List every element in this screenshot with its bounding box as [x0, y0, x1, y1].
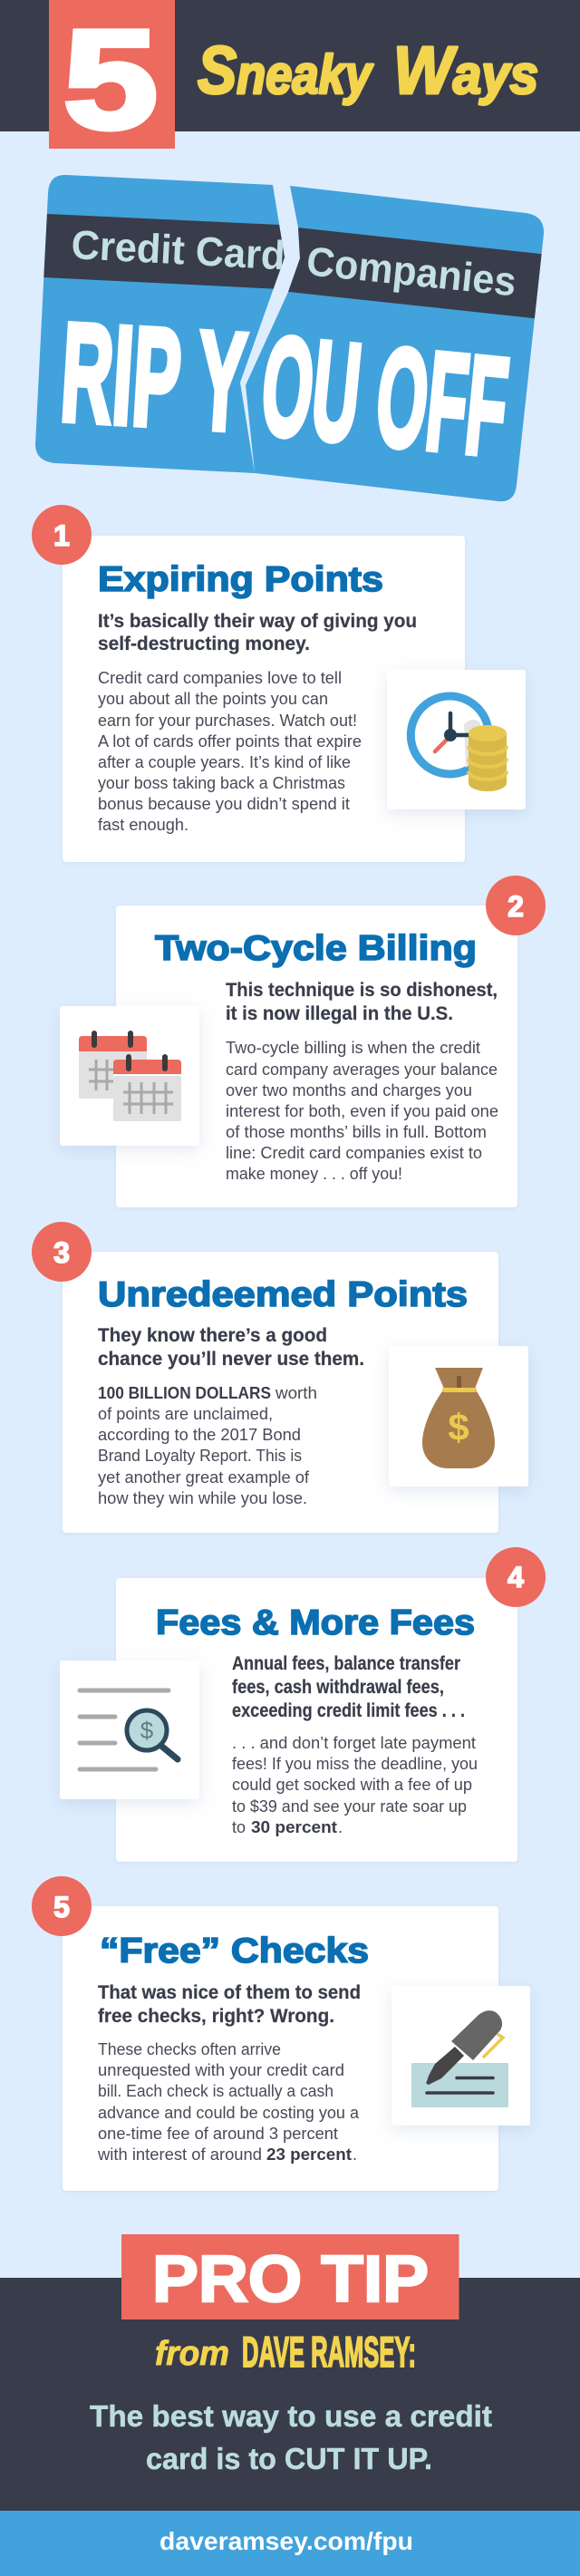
body text 5: one-time fee of around 3 percent [98, 2125, 338, 2143]
subheading 5: free checks, right? Wrong. [98, 2006, 334, 2027]
big number five block [49, 0, 175, 158]
body text 1: you about all the points you can [98, 690, 328, 708]
body text 3: worth [275, 1384, 317, 1402]
panel 1: expiring points [32, 505, 526, 862]
pro tip banner: PRO TIP [152, 2243, 429, 2316]
badge 1 [32, 505, 92, 565]
body text 2: Two-cycle billing is when the credit [226, 1039, 480, 1057]
body text 5: 23 percent [266, 2145, 352, 2164]
heading 2: Two-Cycle Billing [155, 929, 477, 968]
subheading 1: It’s basically their way of giving you [98, 611, 417, 632]
subheading 3: They know there’s a good [98, 1325, 327, 1346]
body text 5: . [353, 2145, 357, 2164]
body text 1: bonus because you didn’t spend it [98, 795, 350, 813]
heading: Sneaky Ways: Ways [393, 33, 538, 108]
body text 1: earn for your purchases. Watch out! [98, 712, 357, 730]
heading 4: Fees & More Fees [156, 1603, 475, 1642]
badge 1: 1 [53, 519, 70, 552]
body text 2 [226, 1039, 498, 1183]
subheading 2: it is now illegal in the U.S. [226, 1003, 453, 1024]
subheading 4: exceeding credit limit fees . . . [232, 1700, 465, 1721]
body text 2: interest for both, even if you paid one [226, 1102, 498, 1120]
body text 3: of points are unclaimed, [98, 1405, 273, 1423]
panel 3: unredeemed points [32, 1222, 528, 1533]
badge 5: 5 [53, 1891, 70, 1923]
body text 5: with interest of around [97, 2145, 262, 2164]
subheading 1 [98, 611, 417, 654]
icon tile: money bag: $ [448, 1406, 469, 1448]
attribution: from Dave Ramsey: DAVE RAMSEY: [242, 2328, 416, 2376]
body text 3: how they win while you lose. [98, 1489, 307, 1507]
card right half [240, 177, 553, 508]
body text 5 [97, 2040, 360, 2164]
pro tip statement: card is to CUT IT UP. [146, 2442, 432, 2475]
attribution: from Dave Ramsey [155, 2328, 416, 2376]
heading 5: “Free” Checks [100, 1932, 369, 1971]
website bar: daveramsey.com/fpu [160, 2527, 413, 2555]
panel 2: two-cycle billing [60, 876, 546, 1207]
icon tile: clock and coins [387, 670, 526, 809]
body text 3: 100 BILLION DOLLARS [98, 1384, 271, 1402]
header band [0, 0, 580, 158]
attribution: from Dave Ramsey: from [155, 2335, 229, 2373]
subheading 4: fees, cash withdrawal fees, [232, 1677, 444, 1698]
body text 4: 30 percent [251, 1818, 337, 1836]
body text 2: card company averages your balance [226, 1060, 498, 1079]
badge 5 [32, 1876, 92, 1936]
body text 4: . . . and don’t forget late payment [232, 1734, 476, 1752]
icon tile: magnifier over bill [60, 1661, 199, 1799]
body text 4: . [338, 1818, 343, 1836]
big number five block: 5 [63, 1, 158, 158]
body text 4: to $39 and see your rate soar up [232, 1797, 467, 1816]
body text 4 [232, 1734, 478, 1836]
subheading 2: This technique is so dishonest, [226, 980, 498, 1001]
badge 3: 3 [53, 1236, 70, 1269]
body text 1: fast enough. [98, 816, 188, 834]
body text 2: of those months’ bills in full. Bottom [226, 1123, 487, 1141]
subheading 4 [232, 1653, 465, 1721]
body text 1: your boss taking back a Christmas [98, 774, 345, 792]
subheading 3 [98, 1325, 364, 1370]
website bar [0, 2511, 580, 2576]
icon tile: magnifier over bill: $ [140, 1717, 154, 1744]
body text 5: unrequested with your credit card [98, 2061, 344, 2079]
body text 1: after a couple years. It’s kind of like [98, 753, 351, 771]
icon tile: money bag [389, 1346, 528, 1487]
body text 4: fees! If you miss the deadline, you [232, 1755, 478, 1773]
card right half: Companies [304, 237, 518, 305]
body text 1: Credit card companies love to tell [98, 669, 342, 687]
badge 4: 4 [508, 1561, 524, 1593]
subheading 5 [98, 1982, 361, 2027]
panel 5: free checks [32, 1876, 530, 2191]
pro tip footer [0, 2234, 580, 2511]
subheading 5: That was nice of them to send [98, 1982, 361, 2003]
pro tip statement [90, 2399, 492, 2475]
panel 4: fees and more fees [60, 1547, 546, 1862]
card left half: RIP Y [57, 294, 250, 460]
body text 2: over two months and charges you [226, 1081, 472, 1099]
pro tip banner [121, 2234, 459, 2319]
icon tile: calendars [60, 1006, 199, 1146]
body text 3: yet another great example of [98, 1468, 310, 1487]
body text 5: advance and could be costing you a [98, 2104, 360, 2122]
body text 2: make money . . . off you! [226, 1165, 402, 1183]
heading: Sneaky Ways [198, 33, 538, 108]
torn credit card title [27, 168, 553, 508]
body text 3: Brand Loyalty Report. This is [98, 1447, 302, 1465]
body text 1 [98, 669, 362, 834]
card left half [35, 175, 285, 473]
subheading 1: self-destructing money. [98, 634, 310, 654]
body text 5: bill. Each check is actually a cash [98, 2082, 334, 2100]
heading 3: Unredeemed Points [98, 1275, 468, 1314]
body text 3 [98, 1384, 317, 1507]
body text 2: line: Credit card companies exist to [226, 1144, 482, 1162]
body text 5: These checks often arrive [98, 2040, 281, 2058]
heading 1: Expiring Points [98, 560, 383, 599]
subheading 3: chance you’ll never use them. [98, 1349, 364, 1370]
pro tip statement: The best way to use a credit [90, 2399, 492, 2433]
badge 2 [486, 876, 546, 935]
body text 1: A lot of cards offer points that expire [98, 732, 362, 751]
subheading 2 [226, 980, 498, 1024]
icon tile: pen signing check [392, 1986, 530, 2126]
card left half: Credit Card [70, 221, 286, 278]
heading: Sneaky Ways: Sneaky [198, 33, 373, 108]
badge 2: 2 [508, 890, 524, 923]
badge 4 [486, 1547, 546, 1607]
subheading 4: Annual fees, balance transfer [232, 1653, 460, 1674]
body text 3: according to the 2017 Bond [98, 1426, 301, 1444]
badge 3 [32, 1222, 92, 1282]
body text 4: could get socked with a fee of up [232, 1776, 472, 1794]
body text 4: to [232, 1818, 246, 1836]
